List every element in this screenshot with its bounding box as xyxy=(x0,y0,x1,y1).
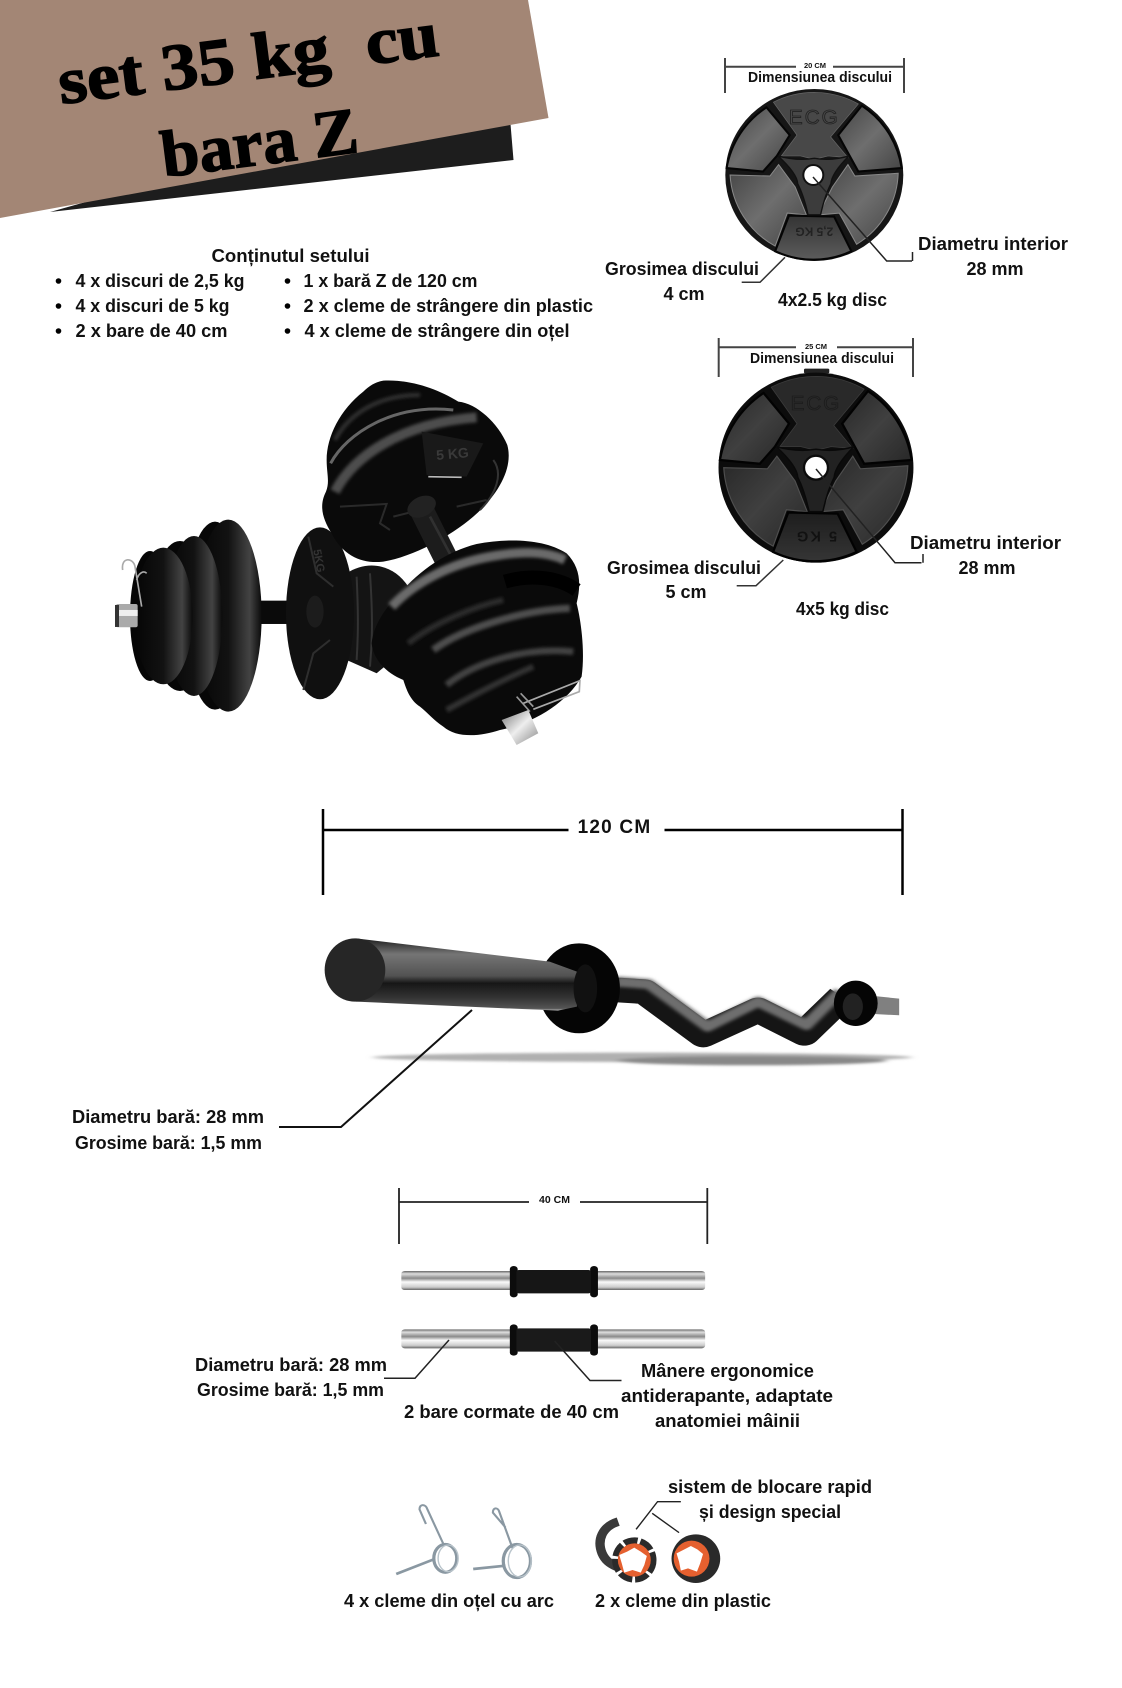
short bar 2 xyxy=(401,1324,705,1356)
label: plastic clips: 2 x cleme din plastic xyxy=(595,1591,771,1611)
label: ergonomic grips: Mânere ergonomice xyxy=(641,1361,814,1381)
top dumbbell: 5 KG xyxy=(435,444,470,463)
label: disc size: Dimensiunea discului xyxy=(750,351,894,367)
short bar 1 xyxy=(401,1266,705,1297)
panel: 5 kg disc xyxy=(607,338,1061,619)
dimension line 40 cm xyxy=(399,1188,707,1244)
icon: plastic clip open xyxy=(600,1522,653,1579)
left dumbbell: 5KG xyxy=(310,548,326,574)
icon: 5 kg disc: ECG xyxy=(791,392,841,415)
dimension bracket 20 cm: 20 CM xyxy=(804,61,826,70)
list column 2: 4 x cleme de strângere din oțel xyxy=(304,321,570,341)
dimension bracket 25 cm: 25 CM xyxy=(805,342,827,351)
label: short bar thickness: Grosime bară: 1,5 mm xyxy=(197,1380,384,1400)
leader: disc thickness xyxy=(742,257,785,282)
label: 4 cm: 4 cm xyxy=(663,284,705,304)
label: 28 mm: 28 mm xyxy=(958,558,1016,578)
bar shadow xyxy=(373,1053,912,1065)
label: inner diameter: Diametru interior xyxy=(910,533,1061,553)
label: disc thickness: Grosimea discului xyxy=(607,558,761,578)
dumbbell pair photo xyxy=(115,381,583,745)
leader: inner diameter xyxy=(813,177,912,261)
label: 4x5 kg disc: 4x5 kg disc xyxy=(796,599,889,619)
big collar xyxy=(538,943,620,1033)
short bars photo xyxy=(401,1266,705,1356)
icon: 2.5 kg disc: 2,5 KG xyxy=(795,224,833,238)
set contents list xyxy=(56,246,593,341)
leader: bar diameter xyxy=(279,1010,472,1127)
list column 1: 2 x bare de 40 cm xyxy=(76,321,228,341)
label: 4x2.5 kg disc: 4x2.5 kg disc xyxy=(778,290,887,310)
icon: 2.5 kg disc xyxy=(725,89,903,261)
banner panel xyxy=(0,0,548,218)
leader: disc thickness xyxy=(737,560,783,586)
label: locking system: sistem de blocare rapid xyxy=(668,1477,872,1497)
icon: 5 kg disc: 5 KG xyxy=(795,528,837,544)
dimension line 40 cm: 40 CM xyxy=(539,1194,570,1206)
label: inner diameter: Diametru interior xyxy=(918,234,1068,254)
sleeve end cap xyxy=(325,938,385,1002)
banner shadow xyxy=(50,124,514,212)
icon: steel spring clip 1 xyxy=(396,1505,458,1574)
title line 1: set 35 kg cu xyxy=(54,0,443,119)
title banner xyxy=(0,0,548,218)
label: 2 short bars: 2 bare cormate de 40 cm xyxy=(404,1402,619,1422)
label: bar thickness: Grosime bară: 1,5 mm xyxy=(75,1133,262,1153)
curved section xyxy=(617,982,842,1035)
list column 1: 4 x discuri de 5 kg xyxy=(76,296,230,316)
dimension bracket 20 cm xyxy=(725,58,904,93)
label: short bar diameter: Diametru bară: 28 mm xyxy=(195,1355,387,1375)
dimension bracket 25 cm xyxy=(719,338,913,377)
list column 2 xyxy=(285,271,593,341)
label: locking system xyxy=(668,1477,872,1522)
icon: 2.5 kg disc: ECG xyxy=(789,106,840,129)
label: ergonomic grips xyxy=(621,1361,833,1431)
leader: short bar diameter xyxy=(384,1340,449,1378)
label: ergonomic grips: anatomiei mâinii xyxy=(655,1411,800,1431)
label: locking system: și design special xyxy=(699,1502,841,1522)
Z bar photo xyxy=(325,938,912,1065)
panel: 2.5 kg disc xyxy=(605,58,1068,310)
clamps photo xyxy=(396,1502,720,1583)
label: bar diameter: Diametru bară: 28 mm xyxy=(72,1107,264,1127)
label: ergonomic grips: antiderapante, adaptate xyxy=(621,1386,833,1406)
dimension line 120 cm: 120 CM xyxy=(578,817,651,838)
list column 1 xyxy=(56,271,245,341)
icon: plastic clip closed xyxy=(672,1534,720,1583)
leader: locking system xyxy=(636,1502,681,1533)
top dumbbell xyxy=(322,381,509,563)
label: 28 mm: 28 mm xyxy=(966,259,1024,279)
list column 1: 4 x discuri de 2,5 kg xyxy=(76,271,244,291)
left dumbbell xyxy=(115,520,408,712)
leader: inner diameter xyxy=(816,469,923,563)
front right stack xyxy=(372,540,583,745)
icon: 5 kg disc xyxy=(719,369,913,563)
icon: steel spring clip 2 xyxy=(473,1508,531,1578)
small collar xyxy=(834,981,878,1026)
bar end xyxy=(874,996,899,1015)
label: disc thickness: Grosimea discului xyxy=(605,259,759,279)
list heading: Conținutul setului xyxy=(212,246,370,266)
label: 5 cm: 5 cm xyxy=(665,582,707,602)
list column 2: 1 x bară Z de 120 cm xyxy=(304,271,478,291)
label: disc size: Dimensiunea discului xyxy=(748,70,892,86)
leader: grip xyxy=(555,1341,622,1380)
title line 2: bara Z xyxy=(157,94,362,192)
thick sleeve xyxy=(356,938,577,1011)
list column 2: 2 x cleme de strângere din plastic xyxy=(304,296,593,316)
dimension line 120 cm xyxy=(323,809,902,895)
label: steel clips: 4 x cleme din oțel cu arc xyxy=(344,1591,554,1611)
